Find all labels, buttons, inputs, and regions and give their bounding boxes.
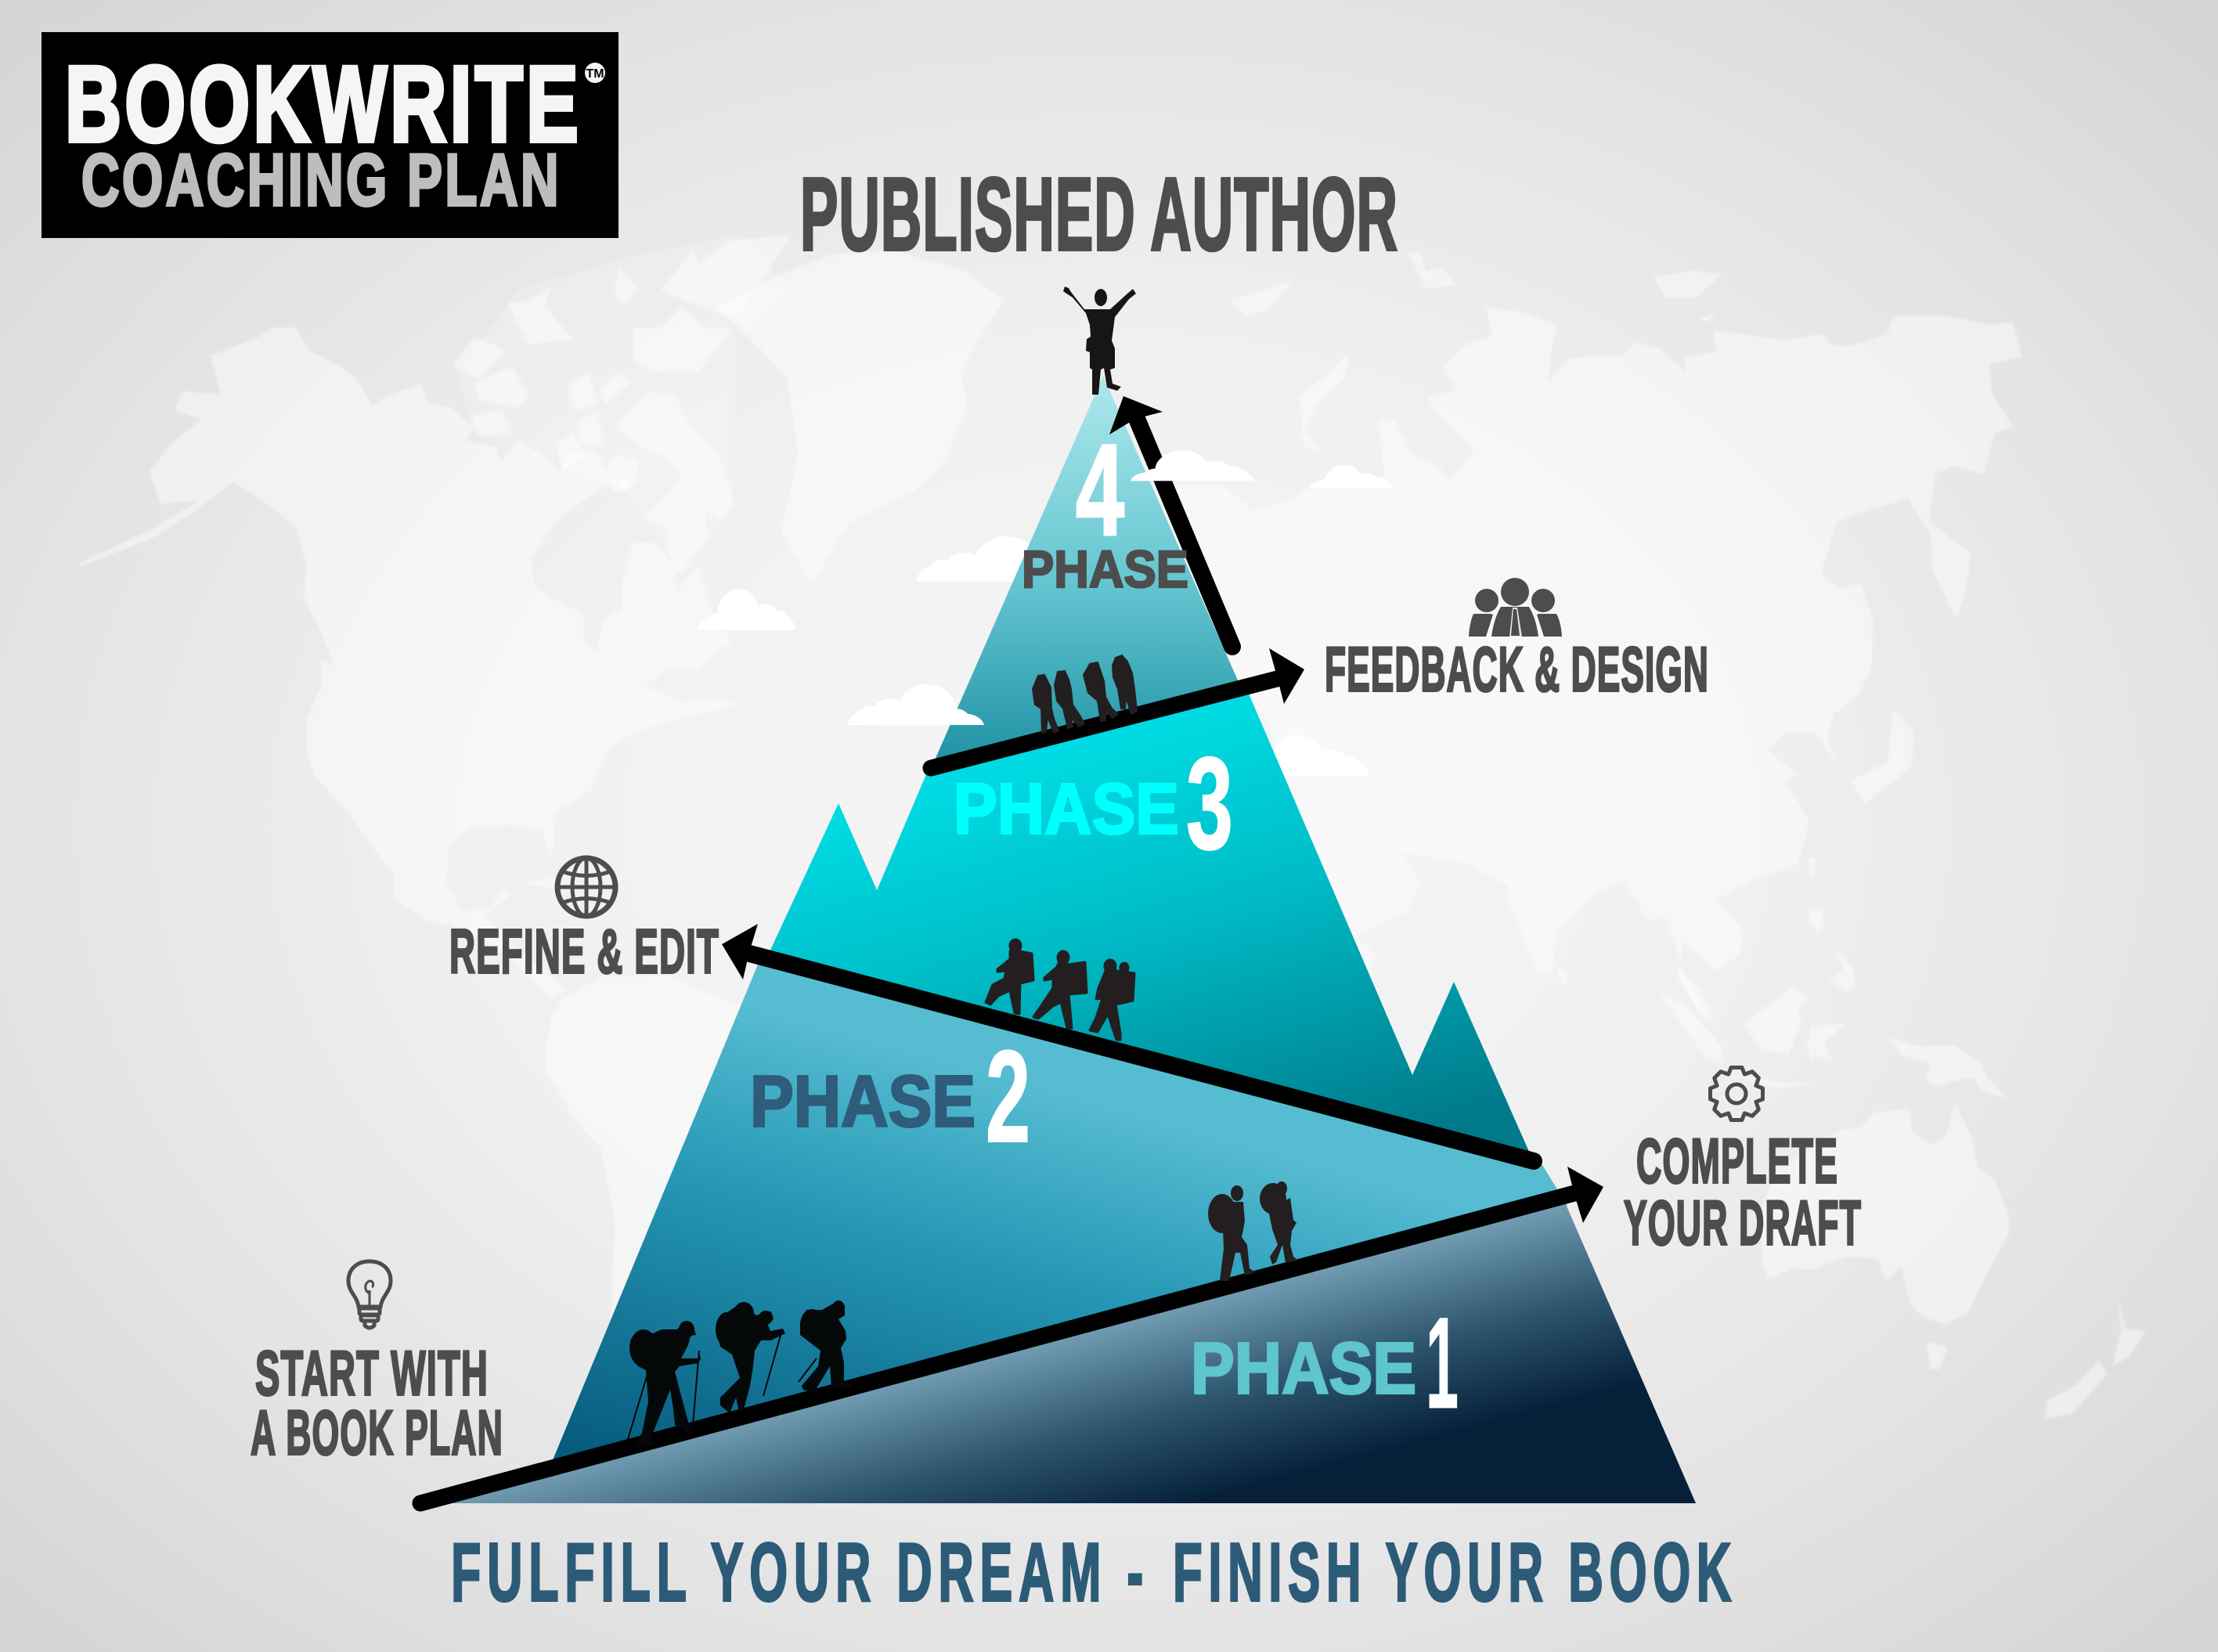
phase 3 label xyxy=(954,730,1233,877)
logo trademark badge xyxy=(585,63,605,83)
phase 3 word: PHASE xyxy=(954,769,1179,849)
mountain layer: phase 1 xyxy=(449,1203,1696,1503)
logo trademark badge: TM xyxy=(586,67,604,81)
icon: team of people xyxy=(1469,578,1562,637)
map: oceania and south-east asia xyxy=(1557,908,2146,1419)
label: start with a book plan xyxy=(251,1339,503,1469)
arrow 2: draft to refine and edit xyxy=(722,924,1534,1161)
phase 2 word: PHASE xyxy=(750,1060,976,1142)
mountain xyxy=(449,376,1696,1503)
mountain layer: phase 2 xyxy=(550,951,1567,1466)
icon: light bulb xyxy=(348,1261,391,1328)
hikers on arrow 3 xyxy=(1033,655,1137,733)
arrow 4: design to summit xyxy=(1109,396,1232,647)
phase 1 word: PHASE xyxy=(1191,1328,1416,1409)
phase 2 label xyxy=(750,1024,1030,1170)
icon: gear xyxy=(1710,1068,1763,1120)
label: complete your draft: YOUR DRAFT xyxy=(1624,1189,1862,1259)
label: complete your draft: COMPLETE xyxy=(1636,1126,1838,1196)
mountain layer: phase 4 xyxy=(931,376,1244,769)
logo xyxy=(41,32,619,238)
clouds in front of the mountain xyxy=(848,450,1253,725)
logo text: coaching plan: COACHING PLAN xyxy=(81,139,561,221)
mountain layer: phase 3 xyxy=(767,683,1533,1160)
summit figure with raised arms xyxy=(1063,287,1136,395)
tagline: FULFILL YOUR DREAM - xyxy=(451,1527,1149,1619)
phase 4 word: PHASE xyxy=(1022,540,1188,599)
map: greenland and iceland xyxy=(716,251,1004,581)
label: start with a book plan: START WITH xyxy=(255,1339,489,1409)
clouds behind the mountain xyxy=(698,465,1393,776)
arrow 1: book plan to draft xyxy=(420,1167,1603,1503)
icon: globe xyxy=(557,858,615,916)
label: start with a book plan: A BOOK PLAN xyxy=(251,1398,503,1469)
phase 2 number: 2 xyxy=(986,1024,1030,1170)
phase 4 label xyxy=(1022,418,1188,599)
map: eurasia xyxy=(1174,253,2022,1032)
logo text: bookwrite: BOOKWRITE xyxy=(65,45,582,164)
world map xyxy=(78,235,2146,1488)
hikers on arrow 2 xyxy=(986,940,1134,1040)
hikers on arrow 1, upper pair xyxy=(1208,1181,1298,1281)
arrow 3: edit to feedback and design xyxy=(931,648,1304,768)
label: feedback and design: FEEDBACK & DESIGN xyxy=(1325,634,1709,705)
infographic canvas: 1 xyxy=(1426,1291,1459,1436)
phase 1 label xyxy=(1191,1291,1459,1436)
phase 4 number: 4 xyxy=(1076,418,1124,563)
hikers on arrow 1, lower trio xyxy=(626,1300,852,1448)
map: north america xyxy=(78,235,792,998)
map: south america xyxy=(544,976,861,1488)
label: complete your draft xyxy=(1624,1126,1862,1259)
label: refine and edit: REFINE & EDIT xyxy=(449,916,719,987)
title: published author: PUBLISHED AUTHOR xyxy=(800,157,1398,272)
phase 3 number: 3 xyxy=(1186,730,1233,877)
tagline: FINISH YOUR BOOK xyxy=(1173,1527,1737,1619)
